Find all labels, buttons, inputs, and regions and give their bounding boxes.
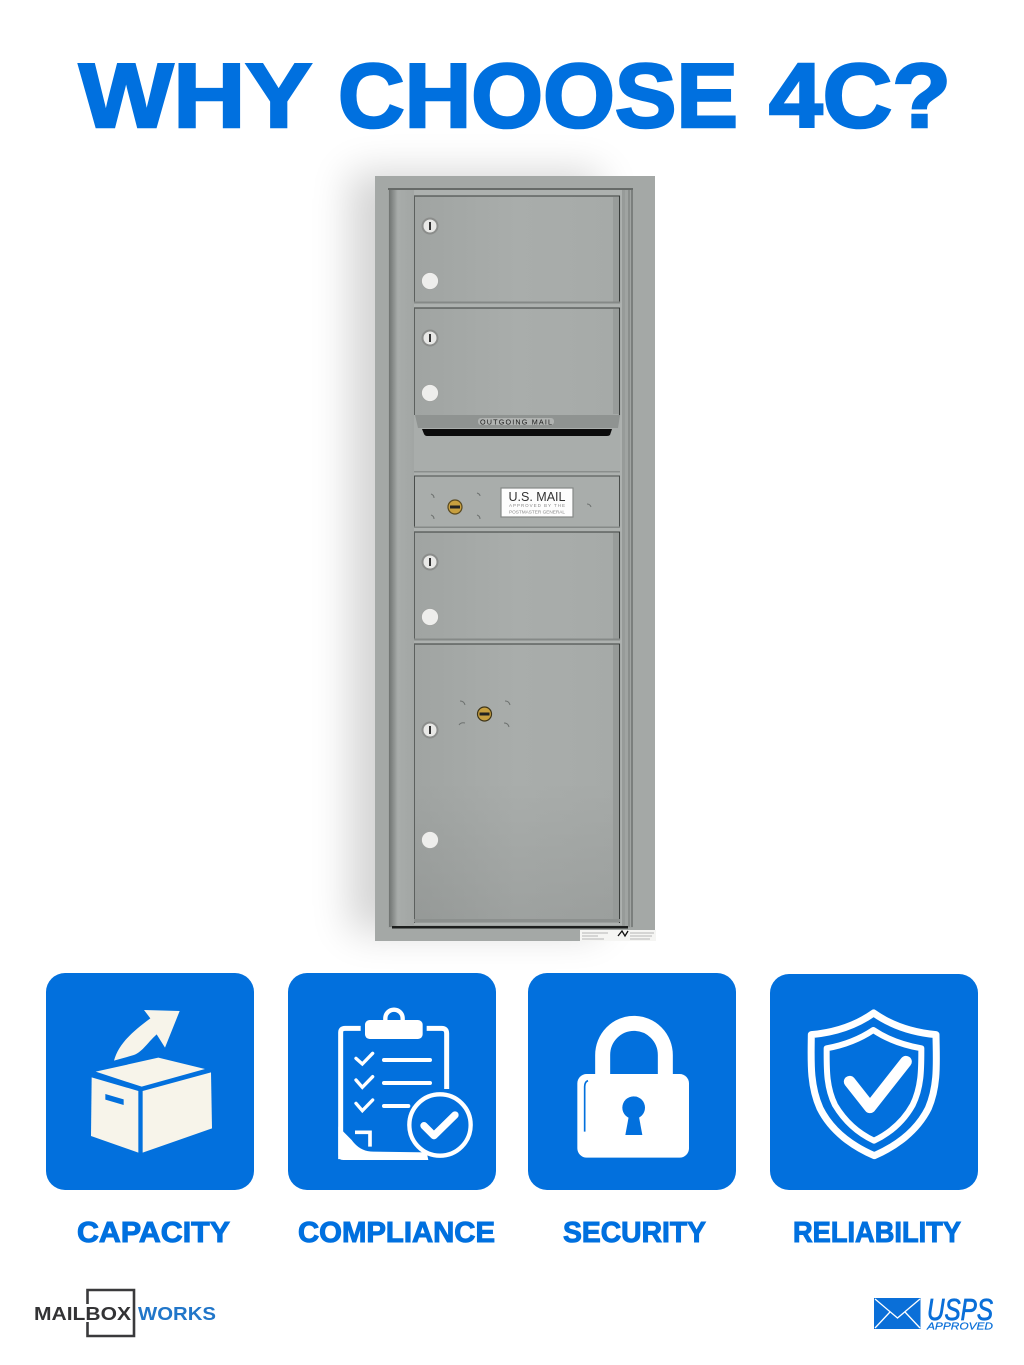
label: capacity: CAPACITY: [77, 1217, 230, 1249]
U.S. Mail plate: POSTMASTER GENERAL: [509, 510, 566, 514]
logo: Mailbox Works: WORKS: [138, 1304, 216, 1324]
product sticker: [580, 930, 656, 941]
panel: compliance: [288, 973, 496, 1190]
mailbox parcel door: [414, 644, 620, 923]
title: WHY: [79, 46, 312, 147]
title: 4C?: [769, 46, 951, 147]
logo: USPS approved: USPS: [927, 1292, 993, 1327]
U.S. Mail plate: [501, 488, 573, 517]
icon: box with arrow: [91, 1010, 212, 1153]
icon: shield with check: [811, 1013, 936, 1156]
panel: security: [528, 973, 736, 1190]
title: [79, 46, 951, 147]
icon: clipboard with check: [338, 1010, 471, 1160]
icon: envelope: [874, 1298, 920, 1329]
icon: padlock: [577, 1023, 689, 1158]
label: reliability: RELIABILITY: [793, 1217, 961, 1249]
label: security: SECURITY: [563, 1217, 706, 1249]
panel: capacity: [46, 973, 254, 1190]
mailbox door 1: [414, 196, 620, 304]
outgoing mail slot: OUTGOING MAIL: [480, 418, 552, 426]
mailbox door 3: [414, 532, 620, 640]
logo: USPS approved: APPROVED: [926, 1322, 993, 1332]
logo: USPS approved: [874, 1292, 993, 1332]
panel: reliability: [770, 974, 978, 1190]
U.S. Mail plate: U.S. MAIL: [508, 489, 566, 504]
U.S. Mail panel: [414, 476, 620, 528]
logo: Mailbox Works: MAILBOX: [34, 1304, 131, 1324]
mailbox door 2: [414, 308, 620, 415]
U.S. Mail plate: APPROVED BY THE: [509, 503, 565, 508]
logo: Mailbox Works: [34, 1290, 216, 1336]
label: compliance: COMPLIANCE: [298, 1217, 495, 1249]
outgoing mail slot: [414, 415, 620, 472]
mailbox unit: [350, 172, 656, 941]
title: CHOOSE: [338, 46, 738, 147]
